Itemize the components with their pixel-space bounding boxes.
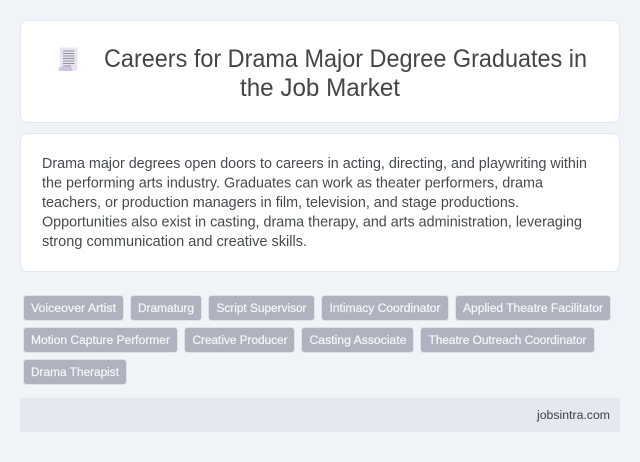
title [104, 45, 587, 102]
footer bar [20, 398, 620, 432]
footer: source site: jobsintra.com [536, 408, 610, 422]
tag: Voiceover Artist: Voiceover Artist [31, 301, 117, 315]
text block: description: Drama major degrees open doors to careers in acting, directing, and playwriting within [42, 156, 587, 172]
title: Careers for Drama Major Degree Graduates in [104, 45, 587, 73]
text block: description: Opportunities also exist in casting, drama therapy, and arts administration, leveraging [42, 214, 582, 230]
panel: header [20, 20, 620, 122]
tag: Drama Therapist: Drama Therapist [31, 365, 120, 379]
panel: career tags [24, 296, 610, 384]
tag: Motion Capture Performer: Motion Capture Performer [31, 333, 170, 347]
tag: Theatre Outreach Coordinator: Theatre Outreach Coordinator [428, 333, 586, 347]
tag: Intimacy Coordinator [322, 296, 448, 320]
tag: Script Supervisor [208, 296, 314, 320]
tag: Voiceover Artist [24, 296, 124, 320]
tag: Dramaturg: Dramaturg [138, 301, 194, 315]
tag: Applied Theatre Facilitator [456, 296, 610, 320]
tag: Casting Associate: Casting Associate [310, 333, 407, 347]
tag: Script Supervisor: Script Supervisor [216, 301, 306, 315]
tag: Theatre Outreach Coordinator [420, 328, 594, 352]
text block: description [42, 156, 587, 250]
title: the Job Market [240, 74, 400, 102]
tag: Applied Theatre Facilitator: Applied Theatre Facilitator [463, 301, 603, 315]
text block: description: strong communication and creative skills. [42, 234, 307, 250]
text block: description: the performing arts industry. Graduates can work as theater performers, drama [42, 176, 544, 192]
tag: Dramaturg [130, 296, 202, 320]
tag: Motion Capture Performer [24, 328, 178, 352]
tag: Intimacy Coordinator: Intimacy Coordinator [330, 301, 440, 315]
icon: script scroll [58, 48, 78, 71]
tag: Creative Producer [184, 328, 294, 352]
tag: Creative Producer: Creative Producer [192, 333, 288, 347]
text block: description: teachers, or production managers in film, television, and stage productions. [42, 195, 519, 211]
tag: Drama Therapist [24, 360, 126, 384]
tag: Casting Associate [302, 328, 414, 352]
panel: description [20, 134, 620, 272]
